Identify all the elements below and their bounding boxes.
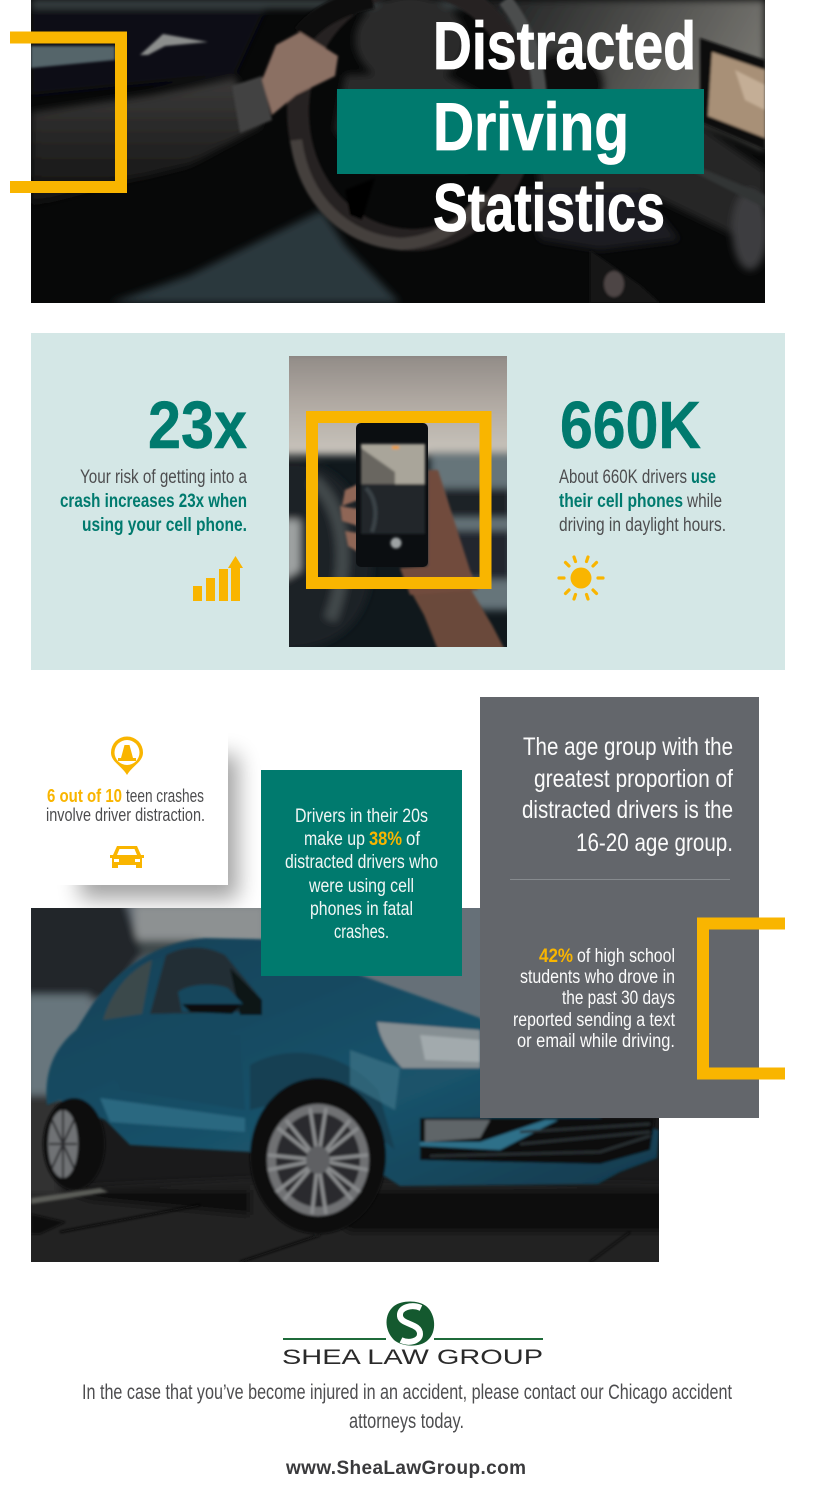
- right bracket: [703, 924, 785, 1074]
- text: 38 percent stat: [285, 806, 438, 943]
- card shadow: [80, 755, 238, 899]
- panel: teen crashes card: [31, 715, 228, 885]
- icon: sun: [559, 557, 603, 599]
- hero left bracket: [10, 38, 121, 187]
- title: [433, 8, 696, 246]
- text: 38 percent stat: Drivers in their 20s: [295, 806, 428, 827]
- grille: [420, 1118, 655, 1164]
- text: 38 percent stat: phones in fatal: [310, 899, 413, 920]
- logo: Shea Law Group: [282, 1302, 543, 1369]
- logo: Shea Law Group: SHEA LAW GROUP: [282, 1346, 543, 1369]
- photo: hand holding phone: [289, 356, 507, 647]
- title: Statistics: [433, 170, 665, 246]
- text: crash risk: Your risk of getting into a: [80, 467, 247, 488]
- icon: rising bars with arrow: [193, 556, 243, 601]
- text: crash risk: using your cell phone.: [82, 515, 247, 536]
- text: high school stat: [513, 946, 676, 1052]
- yellow frame on photo: [312, 417, 486, 583]
- text: 38 percent stat: were using cell: [308, 876, 414, 897]
- photo: blue car: [25, 900, 665, 1270]
- panel: age group and high school stats: [480, 697, 759, 1118]
- text: high school stat: students who drove in: [520, 967, 675, 988]
- stat: 23x: 23x: [148, 388, 247, 463]
- text: age group: 16-20 age group.: [576, 829, 733, 857]
- text: age group: [522, 733, 733, 857]
- stat: 660K: 660K: [560, 388, 701, 463]
- icon: traffic cone pin: [111, 736, 143, 775]
- text: 38 percent stat: make up: [304, 829, 365, 850]
- title: Driving: [433, 89, 629, 165]
- text: high school stat: the past 30 days: [562, 988, 675, 1009]
- text: daylight phone use: [559, 467, 726, 536]
- panel: key statistics: [31, 333, 785, 670]
- closing message: attorneys today.: [349, 1410, 464, 1433]
- text: daylight phone use: About 660K drivers: [559, 467, 687, 488]
- text: crash risk: crash increases 23x when: [60, 491, 247, 512]
- phone: [356, 423, 428, 567]
- rear wheel: [43, 1098, 105, 1190]
- text: teen crash stat: involve driver distraction.: [46, 805, 205, 825]
- headlight: [377, 1022, 480, 1068]
- text: high school stat: reported sending a text: [513, 1010, 676, 1031]
- text: high school stat: 42%: [539, 946, 573, 967]
- title: Distracted: [433, 8, 696, 84]
- hero photo: hands on steering wheel: [31, 0, 768, 303]
- front wheel: [250, 1078, 386, 1234]
- text: teen crash stat: teen crashes: [126, 786, 204, 806]
- text: 38 percent stat: crashes.: [334, 922, 389, 943]
- text: age group: The age group with the: [523, 733, 733, 761]
- text: 38 percent stat: of: [406, 829, 421, 850]
- text: teen crash stat: 6 out of 10: [47, 786, 122, 806]
- text: 38 percent stat: distracted drivers who: [285, 852, 438, 873]
- text: 38 percent stat: 38%: [369, 829, 402, 850]
- text: high school stat: of high school: [577, 946, 675, 967]
- closing message: [82, 1381, 732, 1433]
- text: crash risk: [60, 467, 247, 536]
- panel: drivers in their 20s: [261, 770, 462, 976]
- car body: [46, 938, 659, 1186]
- text: daylight phone use: while: [686, 491, 722, 512]
- icon: car front: [110, 846, 144, 868]
- website url: www.SheaLawGroup.com: [285, 1458, 526, 1479]
- text: teen crash stat: [46, 786, 205, 825]
- text: high school stat: or email while driving.: [517, 1031, 675, 1052]
- text: daylight phone use: driving in daylight hours.: [559, 515, 726, 536]
- text: age group: distracted drivers is the: [522, 796, 733, 824]
- text: age group: greatest proportion of: [534, 765, 733, 793]
- text: daylight phone use: their cell phones: [559, 491, 683, 512]
- title band: [337, 89, 704, 174]
- text: daylight phone use: use: [691, 467, 716, 488]
- windows: [103, 960, 152, 1020]
